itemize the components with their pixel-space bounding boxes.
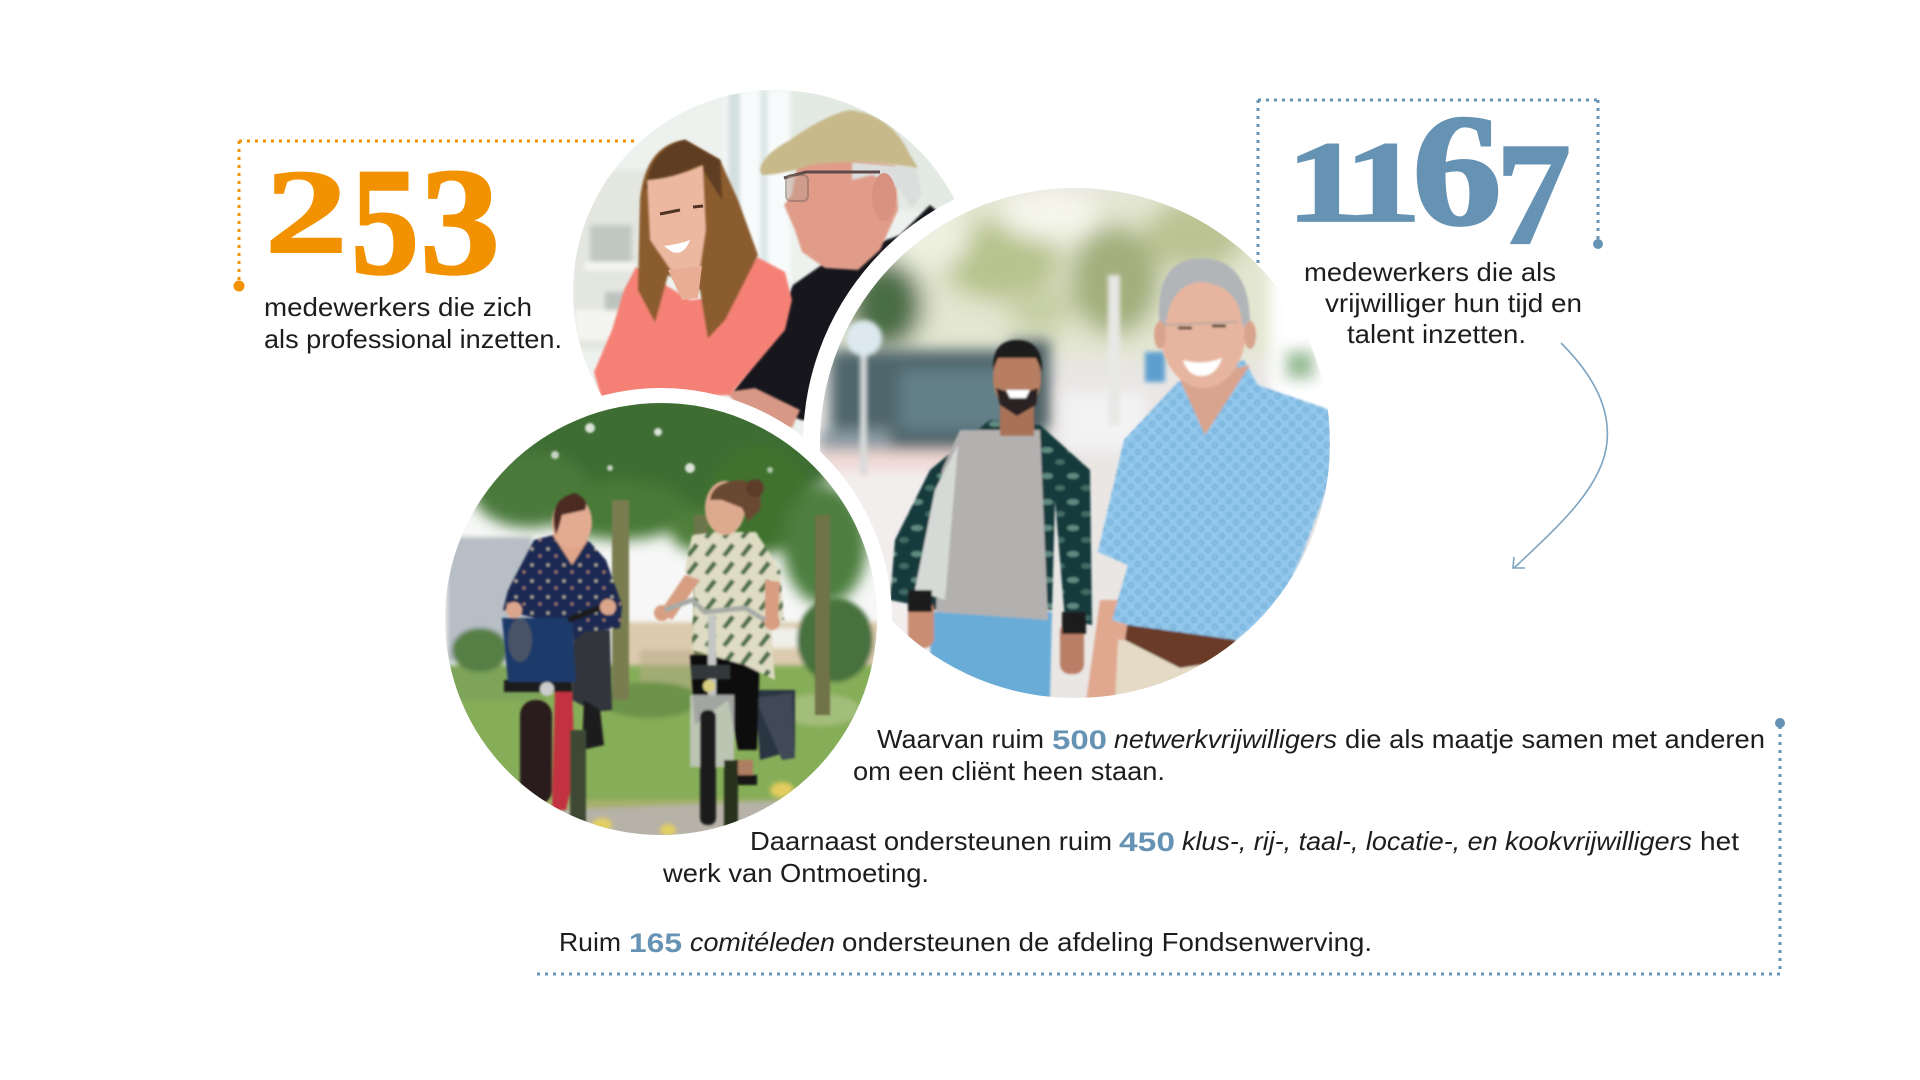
text: klusvrijwilligers: klus-, rij-, taal-, locatie-, en kookvrijwilligers <box>1182 826 1692 856</box>
flat cap <box>760 110 918 175</box>
big number 1167: 6 <box>1412 81 1502 259</box>
white ring around bicycle photo <box>430 388 892 850</box>
text: 253 description: als professional inzetten. <box>264 324 562 354</box>
man's hand <box>726 388 800 428</box>
text: 253 description <box>264 292 562 354</box>
text: klusvrijwilligers: het <box>1700 826 1740 856</box>
salmon top <box>594 257 792 400</box>
right cyclist <box>654 479 795 830</box>
big number 253 <box>265 137 500 307</box>
text: klusvrijwilligers <box>662 826 1740 888</box>
text: 253 description: medewerkers die zich <box>264 292 532 322</box>
photo: two men walking in the street <box>820 188 1340 710</box>
photo: two women on bicycles <box>445 388 880 840</box>
text: netwerkvrijwilligers: netwerkvrijwilligers <box>1114 724 1337 754</box>
callout frame: 253 dotted line <box>234 141 637 292</box>
text: 1167 description: talent inzetten. <box>1347 319 1526 349</box>
big number 253: 2 <box>265 146 347 279</box>
white ring around right photo <box>803 171 1347 715</box>
text: 1167 description: medewerkers die als <box>1304 257 1556 287</box>
text: netwerkvrijwilligers: 500 <box>1052 725 1107 755</box>
text: 1167 description <box>1304 257 1582 349</box>
big number 1167: 1 <box>1286 118 1363 246</box>
text: comiteleden: Ruim <box>559 927 621 957</box>
text: comiteleden: 165 <box>629 928 682 958</box>
big number 1167: 7 <box>1496 114 1571 276</box>
text: 1167 description: vrijwilliger hun tijd en <box>1325 288 1582 318</box>
callout frame: 1167 dotted line <box>1258 100 1603 268</box>
text: netwerkvrijwilligers: om een cliënt heen staan. <box>853 756 1165 786</box>
glasses <box>784 172 880 178</box>
big number 1167: 1 <box>1344 118 1421 246</box>
callout frame: bottom dotted line <box>537 718 1785 974</box>
man with bomber jacket <box>890 340 1092 698</box>
text: netwerkvrijwilligers: die als maatje samen met anderen <box>1345 724 1765 754</box>
man with blue shirt <box>1085 258 1330 710</box>
text: comiteleden: ondersteunen de afdeling Fondsenwerving. <box>842 927 1372 957</box>
tree crown <box>450 388 867 605</box>
text: comiteleden <box>559 927 1372 958</box>
text: klusvrijwilligers: werk van Ontmoeting. <box>662 858 929 888</box>
text: netwerkvrijwilligers <box>853 724 1765 786</box>
big number 253: 5 <box>351 138 419 307</box>
big number 1167 <box>1286 81 1571 276</box>
grey hair <box>852 162 922 208</box>
curved arrow <box>1513 343 1607 568</box>
woman's face <box>647 165 706 272</box>
text: klusvrijwilligers: 450 <box>1119 827 1175 857</box>
black jacket <box>733 205 960 420</box>
big number 253: 3 <box>420 137 500 306</box>
text: comiteleden: comitéleden <box>690 927 835 957</box>
man's head <box>784 150 898 270</box>
left cyclist <box>502 493 622 825</box>
woman's hair back <box>638 140 758 338</box>
infographic canvas <box>234 90 1785 976</box>
text: klusvrijwilligers: Daarnaast ondersteunen ruim <box>750 826 1112 856</box>
photo: young woman and older man in cap <box>573 90 954 436</box>
text: netwerkvrijwilligers: Waarvan ruim <box>877 724 1044 754</box>
